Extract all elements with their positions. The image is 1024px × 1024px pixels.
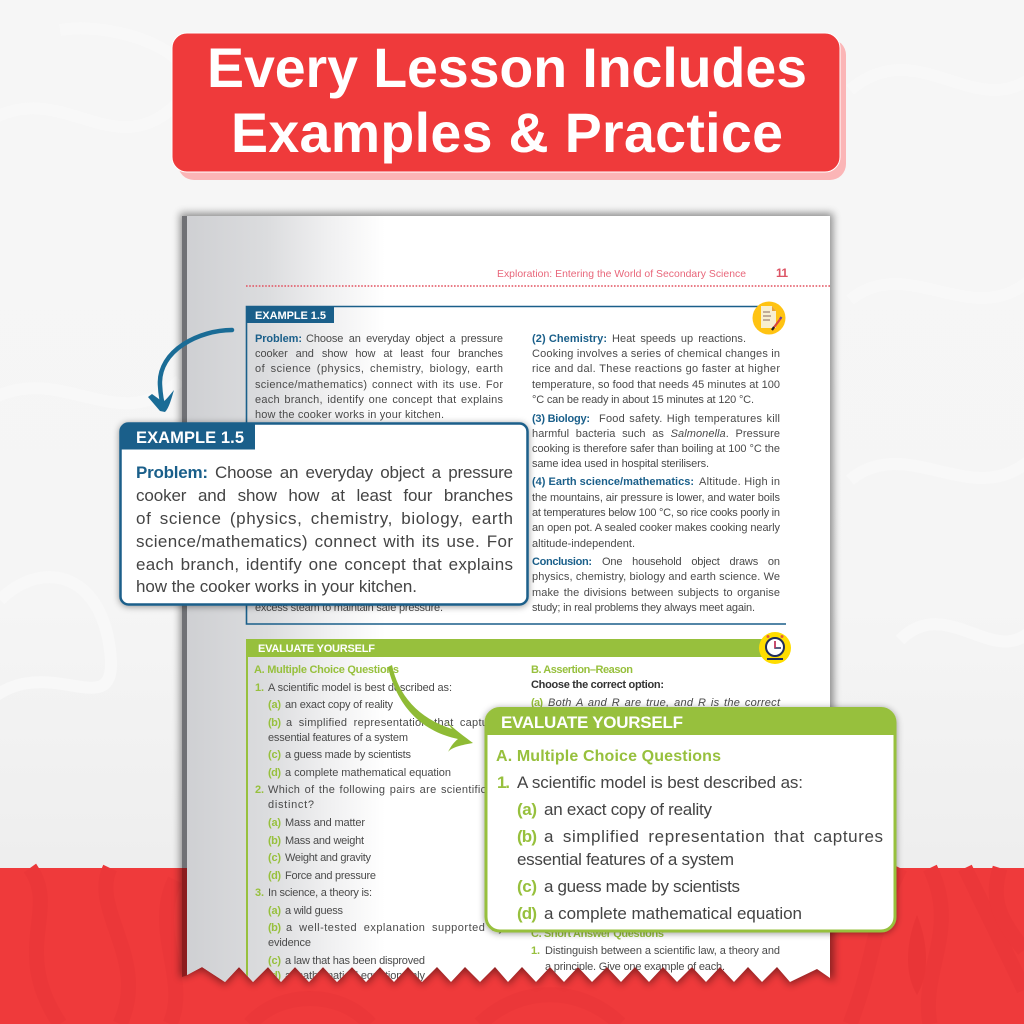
callout question text — [496, 748, 883, 923]
page shadow — [180, 213, 834, 985]
right column text: cooking is therefore safer than boiling at 100 °C the — [532, 443, 780, 455]
left column questions: Weight and gravity — [285, 852, 372, 864]
right column text: harmful bacteria such as Salmonella. Pressure — [532, 428, 780, 440]
right column text: One household object draws on — [602, 556, 780, 568]
left column questions: (c) — [268, 852, 281, 864]
right column questions: 1. — [531, 945, 540, 957]
left column text: each branch, identify one concept that explains — [255, 394, 504, 406]
callout body text: of science (physics, chemistry, biology, earth — [136, 509, 513, 528]
right column text: make the divisions between subjects to organise — [532, 587, 780, 599]
callout body text: cooker and show how at least four branches — [136, 486, 513, 505]
right column questions: B. Assertion–Reason — [531, 664, 633, 676]
left column questions: (c) — [268, 955, 281, 967]
right column text: rice and dal. These reactions go faster at higher — [532, 363, 780, 375]
right column questions: a principle. Give one example of each. — [545, 961, 725, 973]
left column text: how the cooker works in your kitchen. — [255, 409, 444, 421]
right column text: at temperatures below 100 °C, so rice cooks poorly in — [532, 507, 780, 519]
left column text: Problem: — [255, 333, 302, 345]
callout body text: Choose an everyday object a pressure — [215, 463, 513, 482]
right column questions: Choose the correct option: — [531, 679, 664, 691]
left column questions: (a) — [268, 699, 281, 711]
panel: example 1.5 on page — [246, 302, 786, 624]
right column text: Food safety. High temperatures kill — [599, 413, 780, 425]
right column questions: Distinguish between a scientific law, a theory and — [545, 945, 780, 957]
right column text: (4) Earth science/mathematics: — [532, 476, 694, 488]
right column questions: C. Short Answer Questions — [531, 928, 664, 940]
callout body text: each branch, identify one concept that explains — [136, 555, 513, 574]
left column questions — [254, 664, 504, 982]
right column text: °C can be ready in about 15 minutes at 120 °C. — [532, 394, 754, 406]
callout question text: (a) — [517, 800, 537, 819]
icon: clock — [759, 632, 791, 664]
left column questions: Force and pressure — [285, 870, 376, 882]
callout question text: A scientific model is best described as: — [517, 773, 803, 792]
callout body text — [136, 463, 513, 596]
icon: notes and pencil — [752, 302, 786, 334]
right column text: (2) Chemistry: — [532, 333, 607, 345]
title banner — [172, 33, 846, 180]
callout question text: essential features of a system — [517, 850, 734, 869]
left column text: of science (physics, chemistry, biology, earth — [255, 363, 503, 375]
panel: example 1.5 on page: EXAMPLE 1.5 — [255, 310, 326, 322]
left column questions: A. Multiple Choice Questions — [254, 664, 399, 676]
callout question text: a guess made by scientists — [544, 877, 740, 896]
left column questions: a guess made by scientists — [285, 749, 412, 761]
callout question text: a complete mathematical equation — [544, 904, 802, 923]
left column questions: an exact copy of reality — [285, 699, 394, 711]
left column questions: a wild guess — [285, 905, 344, 917]
arrow: green curved — [388, 665, 473, 752]
panel: evaluate yourself on page: EVALUATE YOURSELF — [258, 643, 375, 655]
right column text — [532, 333, 780, 614]
title banner: Every Lesson Includes — [207, 37, 807, 99]
right column text: same idea used in hospital sterilisers. — [532, 458, 709, 470]
callout body text: how the cooker works in your kitchen. — [136, 577, 417, 596]
panel: evaluate yourself on page — [246, 632, 791, 984]
left column questions: (b) — [268, 922, 281, 934]
left column text: Choose an everyday object a pressure — [306, 333, 503, 345]
callout question text: a simplified representation that captures — [544, 827, 883, 846]
arrow: blue curved — [148, 330, 232, 412]
right column text: altitude-independent. — [532, 538, 635, 550]
right column text: temperature, so food that needs 45 minutes at 100 — [532, 379, 780, 391]
callout body text: science/mathematics) connect with its use. For — [136, 532, 513, 551]
callout question text: 1. — [497, 773, 510, 792]
left column text: cooker and show how at least four branches — [255, 348, 504, 360]
running header: Exploration: Entering the World of Secondary Science — [497, 269, 746, 280]
left column questions: Which of the following pairs are scientifically — [268, 784, 504, 796]
right column text: study; in real problems they always meet again. — [532, 602, 755, 614]
right column questions — [531, 664, 781, 973]
left column questions: essential features of a system — [268, 732, 408, 744]
running header — [246, 266, 830, 286]
left column questions: In science, a theory is: — [268, 887, 372, 899]
left column text: excess steam to maintain safe pressure. — [255, 602, 443, 614]
right column text: Conclusion: — [532, 556, 592, 568]
title banner: Examples & Practice — [231, 102, 783, 164]
callout question text: (b) — [517, 827, 537, 846]
callout question text: (c) — [517, 877, 537, 896]
right column questions: (a) — [531, 697, 543, 709]
running header: 11 — [776, 266, 788, 280]
left column questions: 1. — [255, 682, 264, 694]
callout body text: Problem: — [136, 463, 208, 482]
right column text: Cooking involves a series of chemical changes in — [532, 348, 780, 360]
right column text: Altitude. High in — [699, 476, 780, 488]
callout: example 1.5 — [120, 423, 528, 604]
callout question text: (d) — [517, 904, 537, 923]
left column questions: (a) — [268, 905, 281, 917]
right column text: an open pot. A sealed cooker makes cooking nearly — [532, 522, 780, 534]
left column questions: a law that has been disproved — [285, 955, 425, 967]
left column questions: evidence — [268, 937, 311, 949]
left column questions: a mathematical equation only — [285, 970, 426, 982]
left column questions: 3. — [255, 887, 264, 899]
left column questions: (a) — [268, 817, 281, 829]
left column questions: 2. — [255, 784, 264, 796]
callout: evaluate yourself: EVALUATE YOURSELF — [501, 713, 683, 732]
callout question text: A. Multiple Choice Questions — [496, 748, 721, 765]
textbook page — [187, 216, 830, 986]
left column questions: a simplified representation that captures — [286, 717, 504, 729]
left column questions: a complete mathematical equation — [285, 767, 451, 779]
left column questions: (b) — [268, 835, 281, 847]
callout: evaluate yourself — [485, 708, 896, 931]
callout question text: an exact copy of reality — [544, 800, 712, 819]
callout: example 1.5: EXAMPLE 1.5 — [136, 429, 244, 447]
left column questions: (d) — [268, 767, 281, 779]
left column questions: Mass and weight — [285, 835, 364, 847]
left column questions: A scientific model is best described as: — [268, 682, 452, 694]
left column questions: (c) — [268, 749, 281, 761]
left column text: science/mathematics) connect with its use. For — [255, 379, 503, 391]
right column text: physics, chemistry, biology and earth science. We — [532, 571, 780, 583]
left column text — [255, 333, 504, 614]
left column questions: Mass and matter — [285, 817, 365, 829]
right column text: the mountains, air pressure is lower, and water boils — [532, 492, 780, 504]
left column questions: a well-tested explanation supported by — [286, 922, 504, 934]
left column questions: (b) — [268, 717, 281, 729]
left column questions: (d) — [268, 870, 281, 882]
right column text: (3) Biology: — [532, 413, 590, 425]
right column questions: Both A and R are true, and R is the correct — [548, 697, 781, 709]
right column text: Heat speeds up reactions. — [612, 333, 746, 345]
left column questions: distinct? — [268, 799, 314, 811]
left column questions: (d) — [268, 970, 281, 982]
